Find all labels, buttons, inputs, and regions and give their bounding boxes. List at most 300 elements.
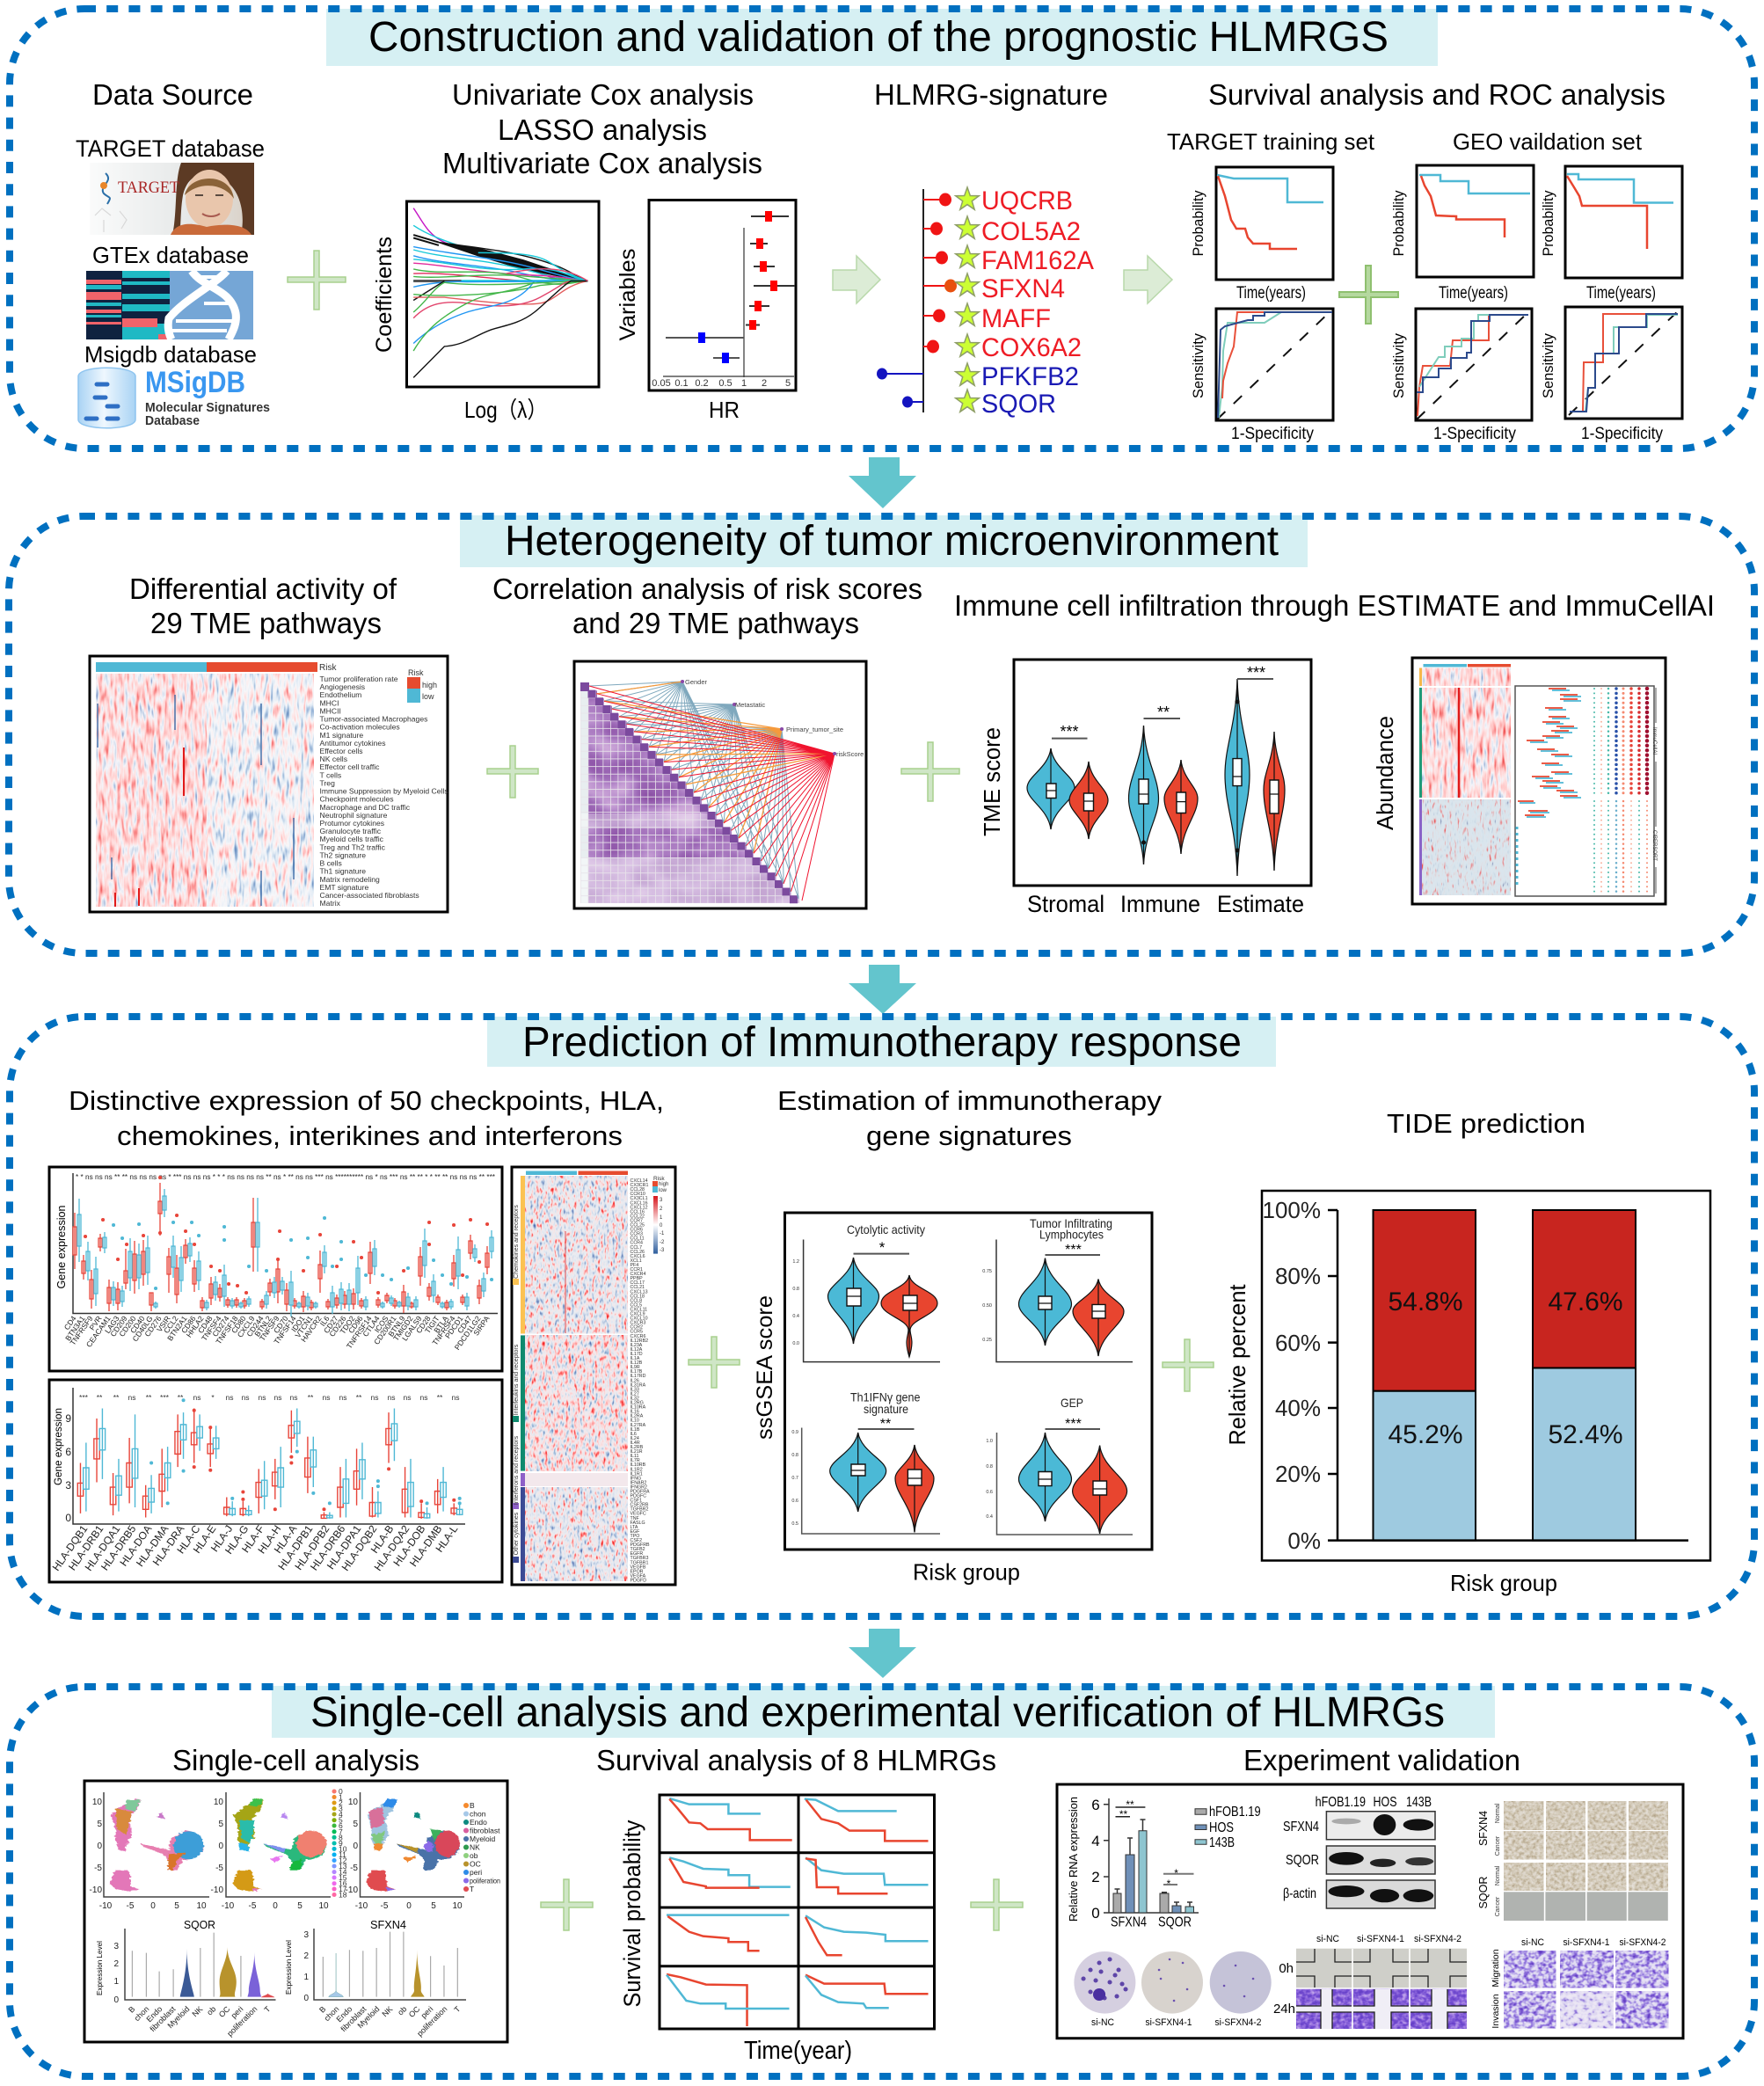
chart: checkpoint gene boxplots: TNFSF18 [214,1314,240,1346]
chart: relative RNA expression bars: * [1167,1878,1171,1890]
chart: HLA gene boxplots: ns [226,1393,233,1402]
chart: HLA gene boxplots: ns [404,1393,411,1402]
chart: checkpoint gene boxplots: IL6 [318,1314,332,1328]
chart: forest plot of hazard ratios: 0.2 [695,378,709,389]
UMAP plots: -5 [381,1901,389,1911]
chart: forest plot of hazard ratios: 0.05 [652,378,671,389]
chart: TME score violins: Estimate [1217,891,1304,917]
chart: HLA gene boxplots: 9 [65,1412,71,1425]
chart: HLA gene boxplots: HLA-DRB5 [98,1522,139,1572]
chart: heatmap of 29 TME pathways: NK cells [320,755,347,763]
chart: forest plot of hazard ratios: 0.5 [718,378,733,389]
chart: relative RNA expression bars: 6 [1091,1797,1100,1813]
violin: GEP: GEP [1061,1396,1083,1410]
chart: HLMRG signature lollipop: UQCRB [981,186,1073,215]
chart: chemokine, interleukin and interferon heatmap: CSF2RB [630,1503,649,1508]
chart: SFXN4 expression violins: B [317,2004,327,2015]
chart: chemokine, interleukin and interferon heatmap: CCL11 [630,1236,645,1242]
chart: heatmap of 29 TME pathways: Risk [319,663,337,673]
legend: cluster numbers: 11 [339,1850,346,1859]
chart: chemokine, interleukin and interferon heatmap: CX3CL1 [630,1196,648,1201]
chart: HLMRG signature lollipop: SQOR [981,390,1056,419]
icon: plus [288,251,346,310]
chart: SQOR expression violins: 0 [113,1995,119,2005]
violin: Th1 IFN gamma gene signature [791,1390,940,1534]
chart: checkpoint gene boxplots: BTN3A1 [63,1314,87,1342]
chart: checkpoint gene boxplots: CD96 [346,1314,365,1335]
chart: checkpoint gene boxplots: TNFSF4 [200,1314,223,1342]
chart: GEO survival curve 2: Probability [1541,190,1556,257]
chart: chemokine, interleukin and interferon heatmap: IFNG [630,1476,641,1481]
chart: forest plot of hazard ratios: 2 [762,378,767,389]
chart: HLA gene boxplots: ns [128,1393,135,1402]
arrow [833,256,880,303]
UMAP plots: 10 [214,1798,223,1807]
chart: HLA gene boxplots: ns [274,1393,281,1402]
chart: chemokine, interleukin and interferon heatmap: IL33 [630,1387,639,1392]
chart: HLA gene boxplots: ** [113,1393,120,1402]
chart: relative RNA expression bars: ** [1126,1798,1134,1811]
chart: chemokine, interleukin and interferon heatmap: PDGFRA [630,1489,650,1494]
chart: checkpoint gene boxplots: CD244 [244,1314,266,1338]
chart: HLMRG signature lollipop [877,186,1094,419]
UMAP plots: -5 [249,1901,257,1911]
chart: HLA gene boxplots: ns [452,1393,459,1402]
chart: chemokine, interleukin and interferon heatmap: PDGFD [630,1578,646,1583]
chart: chemokine, interleukin and interferon heatmap: EGFR [630,1551,643,1557]
image: wound healing assay: si-SFXN4-1 [1357,1934,1404,1944]
arrow [1124,256,1172,303]
chart: SQOR expression violins [96,1918,276,2039]
chart: chemokine, interleukin and interferon heatmap: IL21R [630,1449,643,1455]
image: transwell migration and invasion: Migration [1491,1949,1501,1988]
arrow: down to immunotherapy section [849,965,916,1014]
chart: heatmap of 29 TME pathways: T cells [320,770,341,779]
UMAP plots: -10 [222,1901,235,1911]
violin: Th1 IFN gamma gene signature: 0.7 [791,1476,798,1481]
chart: ImmuCellAI abundance heatmap: CIBERSORT [1651,830,1657,861]
UMAP plots: 5 [353,1820,358,1829]
chart: chemokine, interleukin and interferon heatmap: TPO [630,1534,639,1539]
chart: checkpoint gene boxplots: TNFRSF9 [69,1314,95,1346]
chart: chemokine, interleukin and interferon heatmap: IL12A [630,1347,643,1353]
chart: chemokine, interleukin and interferon heatmap: TGFBR3 [630,1556,648,1561]
chart: chemokine, interleukin and interferon heatmap [512,1167,675,1585]
heading: immunotherapy gene signatures: Estimation of immunotherapy [777,1085,1163,1116]
chart: checkpoint gene boxplots: TDO2 [338,1314,357,1336]
image: transwell migration and invasion: Invasion [1491,1994,1501,2029]
chart: chemokine, interleukin and interferon heatmap: CXCL11 [630,1307,647,1312]
chart: single-cell UMAP and violin panel [84,1781,507,2042]
chart: forest plot of hazard ratios: 5 [785,378,791,389]
legend: cluster numbers: 8 [339,1833,343,1842]
chart: TIDE stacked bars [1224,1191,1710,1596]
chart: HLA gene boxplots: HLA-B [368,1523,396,1556]
chart: GEO survival curve 1: Probability [1391,190,1407,257]
icon: plus [1163,1339,1214,1391]
chart: chemokine, interleukin and interferon heatmap: IL6 [630,1432,637,1437]
icon: plus [689,1337,740,1388]
chart: LASSO coefficient paths: Coefficients [372,237,397,353]
chart: HLA gene boxplots: HLA-DPB2 [292,1522,332,1572]
image: immunohistochemistry grid: Normal [1495,1865,1501,1885]
UMAP plots: -10 [99,1901,113,1911]
UMAP plots: 5 [431,1901,436,1911]
chart: HLA gene boxplots: * [211,1393,215,1402]
chart: checkpoint gene boxplots: CEACAM1 [84,1314,113,1349]
chart: chemokine, interleukin and interferon heatmap: CCL18 [630,1294,645,1299]
chart: heatmap of 29 TME pathways: Matrix remodeling [320,875,380,884]
chart: HLMRG signature lollipop: SFXN4 [981,274,1065,303]
chart: TARGET ROC curve: 1-Specificity [1231,425,1314,443]
chart: SQOR expression violins: chon [133,2004,150,2023]
legend: cluster numbers: 14 [339,1868,347,1877]
legend: cell types: ob [470,1851,478,1860]
chart: heatmap of 29 TME pathways: Granulocyte traffic [320,827,382,835]
chart: chemokine, interleukin and interferon heatmap: IL26 [630,1378,639,1383]
chart: HLA gene boxplots [49,1380,502,1582]
chart: chemokine, interleukin and interferon heatmap: IL7R [630,1458,640,1463]
icon: plus [901,742,959,801]
panel: heterogeneity of tumor microenvironment [9,515,1754,953]
chart: chemokine, interleukin and interferon heatmap: CCL22 [630,1214,645,1219]
chart: heatmap of 29 TME pathways: Risk [408,668,424,677]
chart: TME score violins: *** [1060,723,1079,740]
chart: GEO ROC curve 1: Sensitivity [1390,333,1407,398]
chart: SFXN4 expression violins: ob [396,2004,408,2017]
chart: SQOR expression violins: Expression Level [96,1941,104,1995]
violin: cytolytic activity: * [879,1239,886,1256]
image: colony formation plates: si-SFXN4-2 [1215,2017,1261,2028]
chart: HLA gene boxplots: HLA-DQB2 [339,1522,380,1573]
chart: checkpoint gene boxplots: CD47 [456,1314,474,1335]
chart: chemokine, interleukin and interferon heatmap: IL10RA [630,1405,646,1411]
chart: heatmap of 29 TME pathways: Macrophage and DC traffic [320,803,411,812]
arrow: down to TME section [849,457,916,508]
chart: chemokine, interleukin and interferon heatmap: CCR7 [630,1218,643,1223]
chart: checkpoint gene boxplots: PDCD1 [443,1314,465,1340]
image: immunohistochemistry grid: SFXN4 [1477,1811,1490,1846]
chart: HLA gene boxplots: HLA-E [191,1523,218,1556]
chart: checkpoint gene boxplots: TNFRSF14 [345,1314,374,1350]
chart: checkpoint gene boxplots: VTCN1 [293,1314,315,1339]
chart: chemokine, interleukin and interferon heatmap: CXCR6 [630,1334,646,1339]
chart: chemokine, interleukin and interferon heatmap: IL17B [630,1369,643,1375]
chart: chemokine, interleukin and interferon heatmap: 1 [660,1215,663,1221]
chart: TIDE stacked bars: 80% [1275,1263,1321,1289]
heading: Cox and LASSO analyses: Multivariate Cox analysis [442,147,762,179]
UMAP plots: 5 [97,1820,102,1829]
chart: heatmap of 29 TME pathways: Myeloid cells traffic [320,835,384,843]
legend: cluster numbers: 7 [339,1827,343,1836]
chart: TME score violins: *** [1247,664,1265,682]
chart: TIDE stacked bars: 60% [1275,1330,1321,1356]
chart: checkpoint gene boxplots: TMIGD2 [391,1314,415,1342]
chart: TARGET survival curve: Time(years) [1236,284,1306,303]
violin: tumor infiltrating lymphocytes: 0.50 [982,1303,992,1309]
chart: chemokine, interleukin and interferon heatmap: IL23A [630,1343,643,1348]
heading: correlation analysis: and 29 TME pathways [572,607,859,639]
chart: relative RNA expression bars: SQOR [1158,1915,1192,1930]
chart: checkpoint gene boxplots: CD27 [322,1314,340,1335]
chart: chemokine, interleukin and interferon heatmap: CXCL13 [630,1289,648,1295]
chart: chemokine, interleukin and interferon heatmap: IL27RA [630,1423,646,1428]
label: GEO validation set: GEO vaildation set [1453,128,1643,155]
image: TARGET logo with girl photo: TARGET [118,179,179,197]
chart: HLA gene boxplots: ns [193,1393,200,1402]
chart: HLA gene boxplots: HLA-DPB1 [275,1522,316,1572]
legend: cluster numbers: 17 [339,1885,347,1893]
chart: SQOR expression violins: fibroblast [149,2004,178,2033]
violin: GEP [986,1396,1133,1535]
UMAP plots: -10 [346,1885,358,1895]
chart: SFXN4 expression violins: 2 [303,1951,309,1961]
chart: chemokine, interleukin and interferon heatmap: PDGFRB [630,1543,650,1548]
chart: HLA gene boxplots: HLA-DOA [117,1523,154,1568]
image: wound healing assay: 0h [1279,1961,1294,1976]
UMAP plots: 5 [174,1901,179,1911]
heading: survival analysis of 8 HLMRGs: Survival analysis of 8 HLMRGs [596,1744,996,1776]
chart: correlation network: Primary_tumor_site [786,726,843,733]
chart: HLA gene boxplots: ns [339,1393,346,1402]
chart: chemokine, interleukin and interferon heatmap: CXCL16 [630,1200,648,1206]
chart: heatmap of 29 TME pathways: Tumor proliferation rate [320,675,398,683]
heading: experiment validation: Experiment validation [1243,1744,1520,1776]
image: transwell migration and invasion [1491,1937,1669,2029]
chart: correlation network: Gender [685,678,708,686]
chart: TARGET survival curve [1191,167,1333,303]
UMAP plots: -10 [355,1901,368,1911]
panel: prediction of immunotherapy response [10,1017,1754,1616]
chart: HLA gene boxplots: HLA-DQA2 [372,1522,412,1573]
chart: heatmap of 29 TME pathways: MHCI [320,698,339,707]
chart: heatmap of 29 TME pathways: Co-activation molecules [320,723,400,732]
heading: distinctive expression [69,1085,664,1151]
legend: cluster numbers [334,1787,347,1900]
image: MSigDB logo: Molecular Signatures [145,400,270,415]
chart: heatmap of 29 TME pathways: Tumor-associated Macrophages [320,714,427,723]
title: Single-cell analysis and experimental verification of HLMRGs [310,1689,1445,1736]
violin: cytolytic activity: 0.8 [792,1287,799,1292]
chart: chemokine, interleukin and interferon heatmap: IL1B [630,1427,640,1433]
chart: HLA gene boxplots: ns [323,1393,330,1402]
chart: TIDE stacked bars: Risk group [1450,1570,1557,1596]
chart: forest plot of hazard ratios [616,201,796,423]
chart: relative RNA expression bars: * [1174,1867,1178,1879]
image: wound healing assay: si-SFXN4-2 [1414,1934,1461,1944]
chart: GEO survival curve 1: Time(years) [1439,284,1508,303]
image: MSigDB logo [78,366,270,428]
violin: GEP: 0.8 [986,1464,993,1470]
legend: cluster numbers: 18 [339,1891,347,1900]
chart: checkpoint gene boxplots: PVR [87,1314,104,1331]
label: TARGET training set: TARGET training set [1167,128,1375,155]
chart: correlation network: Metastatic [735,701,765,709]
chart: heatmap of 29 TME pathways: EMT signature [320,883,368,892]
chart: heatmap of 29 TME pathways: B cells [320,858,342,867]
violin: GEP: 0.6 [986,1490,993,1495]
UMAP plots: -5 [127,1901,135,1911]
chart: chemokine, interleukin and interferon heatmap: CXCL10 [630,1317,648,1322]
UMAP plots: -5 [94,1864,102,1873]
chart: SQOR expression violins: NK [190,2004,204,2018]
chart: forest plot of hazard ratios: Variables [616,248,640,341]
chart: checkpoint gene boxplots: * * ns ns ns ** ** ns ns ns ns * *** ns ns ns * * * ns ns ns ns ** ns * ** ns ns *** ns ********** ns * ns *** ns ** ** * * ** ** ns ns ns ** *** [76,1173,495,1181]
chart: checkpoint gene boxplots: Gene expression [55,1205,68,1289]
chart: chemokine, interleukin and interferon heatmap: CSF1 [630,1499,642,1504]
violin: cytolytic activity: 0.4 [792,1314,799,1319]
violin: cytolytic activity: Cytolytic activity [847,1222,925,1236]
chart: HLA gene boxplots: HLA-H [255,1523,283,1556]
legend: cluster numbers: 1 [339,1792,343,1801]
chart: forest plot of hazard ratios: 0.1 [674,378,689,389]
chart: relative RNA expression bars: HOS [1209,1820,1234,1835]
chart: SFXN4 expression violins: 0 [303,1994,309,2003]
chart: ssGSEA violin panels: ssGSEA score [753,1295,777,1440]
chart: heatmap of 29 TME pathways: Effector cells [320,747,363,755]
chart: HLA gene boxplots: HLA-C [174,1522,203,1556]
chart: SQOR expression violins: ob [205,2004,217,2017]
chart: HLA gene boxplots: ns [290,1393,297,1402]
chart: chemokine, interleukin and interferon heatmap: IL2RA [630,1414,644,1419]
chart: chemokine, interleukin and interferon heatmap: IL1R2 [630,1467,643,1472]
chart: SQOR expression violins: SQOR [184,1918,215,1931]
chart: heatmap of 29 TME pathways: Th1 signature [320,867,366,876]
UMAP plots: 5 [218,1820,223,1829]
chart: heatmap of 29 TME pathways: Neutrophil signature [320,811,388,820]
chart: checkpoint gene boxplots: CD200 [117,1314,138,1338]
violin: Th1 IFN gamma gene signature: 0.6 [791,1499,798,1504]
chart: chemokine, interleukin and interferon heatmap: IL12RB2 [630,1338,648,1344]
chart: ImmuCellAI abundance heatmap: ImmuCellAI [1651,727,1657,755]
violin: cytolytic activity: 1.2 [792,1259,799,1265]
chart: heatmap of 29 TME pathways: Treg [320,779,335,788]
image: western blot: hFOB1.19 [1316,1795,1366,1810]
chart: HLA gene boxplots: ** [308,1393,314,1402]
chart: chemokine, interleukin and interferon heatmap: Interleukins and receptors [514,1344,520,1415]
legend: cluster numbers: 13 [339,1862,347,1871]
chart: chemokine, interleukin and interferon heatmap: Risk [653,1176,665,1182]
chart: checkpoint gene boxplots: BTNL2 [252,1314,273,1338]
UMAP plots: 10 [452,1901,463,1911]
image: transwell migration and invasion: si-SFXN4-2 [1620,1937,1666,1948]
chart: TIDE stacked bars: 47.6% [1548,1287,1623,1317]
chart: HLA gene boxplots: HLA-DOB [390,1523,427,1568]
chart: chemokine, interleukin and interferon heatmap: Chemokines and receptors [514,1205,520,1279]
icon: plus [1339,266,1398,324]
UMAP plots: 0 [97,1842,102,1851]
chart: HLMRG signature lollipop: COL5A2 [981,217,1081,246]
violin: GEP: 0.4 [986,1514,993,1520]
chart: checkpoint gene boxplots: BTNL9 [386,1314,407,1338]
chart: heatmap of 29 TME pathways: high [422,681,437,689]
legend: cell types: Myeloid [470,1834,496,1843]
chart: chemokine, interleukin and interferon heatmap: high [659,1182,668,1187]
legend: cluster numbers: 4 [339,1810,343,1819]
chart: GEO survival curve 2 [1541,166,1682,303]
chart: chemokine, interleukin and interferon heatmap: CCR4 [630,1241,643,1246]
chart: chemokine, interleukin and interferon heatmap: CCL8 [630,1298,642,1303]
chart: checkpoint gene boxplots: VSIR [155,1314,172,1333]
chart: chemokine, interleukin and interferon heatmap: IL12B [630,1360,643,1366]
image: immunohistochemistry grid: Normal [1495,1803,1501,1823]
UMAP plots: -5 [215,1864,223,1873]
chart: SQOR expression violins: Myeloid [165,2004,191,2030]
panel: experiment validation composite [1057,1784,1683,2039]
chart: chemokine, interleukin and interferon heatmap: CCL7 [630,1245,642,1251]
chart: chemokine, interleukin and interferon heatmap: low [659,1188,667,1193]
chart: chemokine, interleukin and interferon heatmap: 2 [660,1207,663,1212]
UMAP plots: 10 [92,1798,102,1807]
chart: ImmuCellAI abundance heatmap [1374,658,1666,904]
violin: tumor infiltrating lymphocytes [982,1216,1133,1362]
chart: SQOR expression violins: 3 [113,1942,119,1951]
panel: construction and validation of the prognostic HLMRGS [10,9,1754,449]
chart: chemokine, interleukin and interferon heatmap: CCR1 [630,1267,643,1273]
chart: heatmap of 29 TME pathways: MHCII [320,707,341,716]
image: MSigDB logo: Database [145,413,200,428]
chart: chemokine, interleukin and interferon heatmap: CCR5 [630,1330,643,1335]
image: colony formation plates: si-SFXN4-1 [1145,2017,1192,2028]
chart: chemokine, interleukin and interferon heatmap: TGFBR1 [630,1560,648,1565]
chart: chemokine, interleukin and interferon heatmap: IL10RB [630,1462,646,1468]
chart: HLA gene boxplots: HLA-L [433,1522,461,1555]
chart: TARGET ROC curve [1190,309,1333,443]
legend: cluster numbers: 16 [339,1879,347,1888]
violin: cytolytic activity: 0.0 [792,1341,799,1346]
chart: chemokine, interleukin and interferon heatmap: CCR6 [630,1228,643,1233]
chart: chemokine, interleukin and interferon heatmap: IL1A [630,1356,640,1361]
image: immunohistochemistry grid: SQOR [1477,1877,1490,1908]
heading: Cox and LASSO analyses [442,78,762,179]
chart: TIDE stacked bars: 45.2% [1388,1420,1463,1449]
chart: checkpoint gene boxplots: CD226 [327,1314,348,1338]
chart: checkpoint gene boxplots: TNFSF14 [272,1314,298,1346]
chart: ssGSEA violin panels [753,1213,1152,1586]
arrow: down to single-cell section [849,1629,916,1678]
chart: chemokine, interleukin and interferon heatmap: -2 [660,1240,665,1245]
chart: TME score violins [980,660,1311,917]
chart: checkpoint gene boxplots: CD4 [62,1314,78,1331]
chart: checkpoint gene boxplots: CD70 [272,1314,290,1335]
chart: chemokine, interleukin and interferon heatmap: CCR10 [630,1192,645,1197]
chart: TIDE stacked bars: 0% [1287,1528,1321,1554]
chart: SFXN4 expression violins: OC [407,2004,422,2019]
image: transwell migration and invasion: si-NC [1521,1937,1544,1948]
chart: relative RNA expression bars: Relative RNA expression [1067,1797,1080,1922]
chart: chemokine, interleukin and interferon heatmap: TGFBR2 [630,1507,648,1513]
chart: HLA gene boxplots: HLA-DPA1 [324,1522,364,1572]
chart: HLA gene boxplots: ns [242,1393,249,1402]
chart: HLA gene boxplots: HLA-A [272,1523,299,1556]
chart: chemokine, interleukin and interferon heatmap: CX3CR1 [630,1183,648,1188]
chart: checkpoint gene boxplots: SIRPA [471,1314,492,1338]
chart: chemokine, interleukin and interferon heatmap: VEGFA [630,1573,646,1579]
chart: HLA gene boxplots: HLA-DMA [134,1523,171,1569]
chart: GEO ROC curve 2 [1540,307,1682,443]
chart: HLMRG signature lollipop: MAFF [981,304,1051,333]
chart: chemokine, interleukin and interferon heatmap: CCL21 [630,1285,645,1290]
UMAP plots: -5 [350,1864,358,1873]
legend: cell types: poliferation [470,1877,500,1885]
heading: correlation analysis [492,573,922,639]
image: immunohistochemistry grid [1477,1801,1668,1921]
chart: chemokine, interleukin and interferon heatmap: PDGFC [630,1494,646,1499]
chart: SQOR expression violins: peri [230,2004,244,2020]
chart: SQOR expression violins: B [127,2004,136,2015]
label: GTEx database: GTEx database [92,242,249,268]
chart: chemokine, interleukin and interferon heatmap: TGFB2 [630,1547,645,1552]
